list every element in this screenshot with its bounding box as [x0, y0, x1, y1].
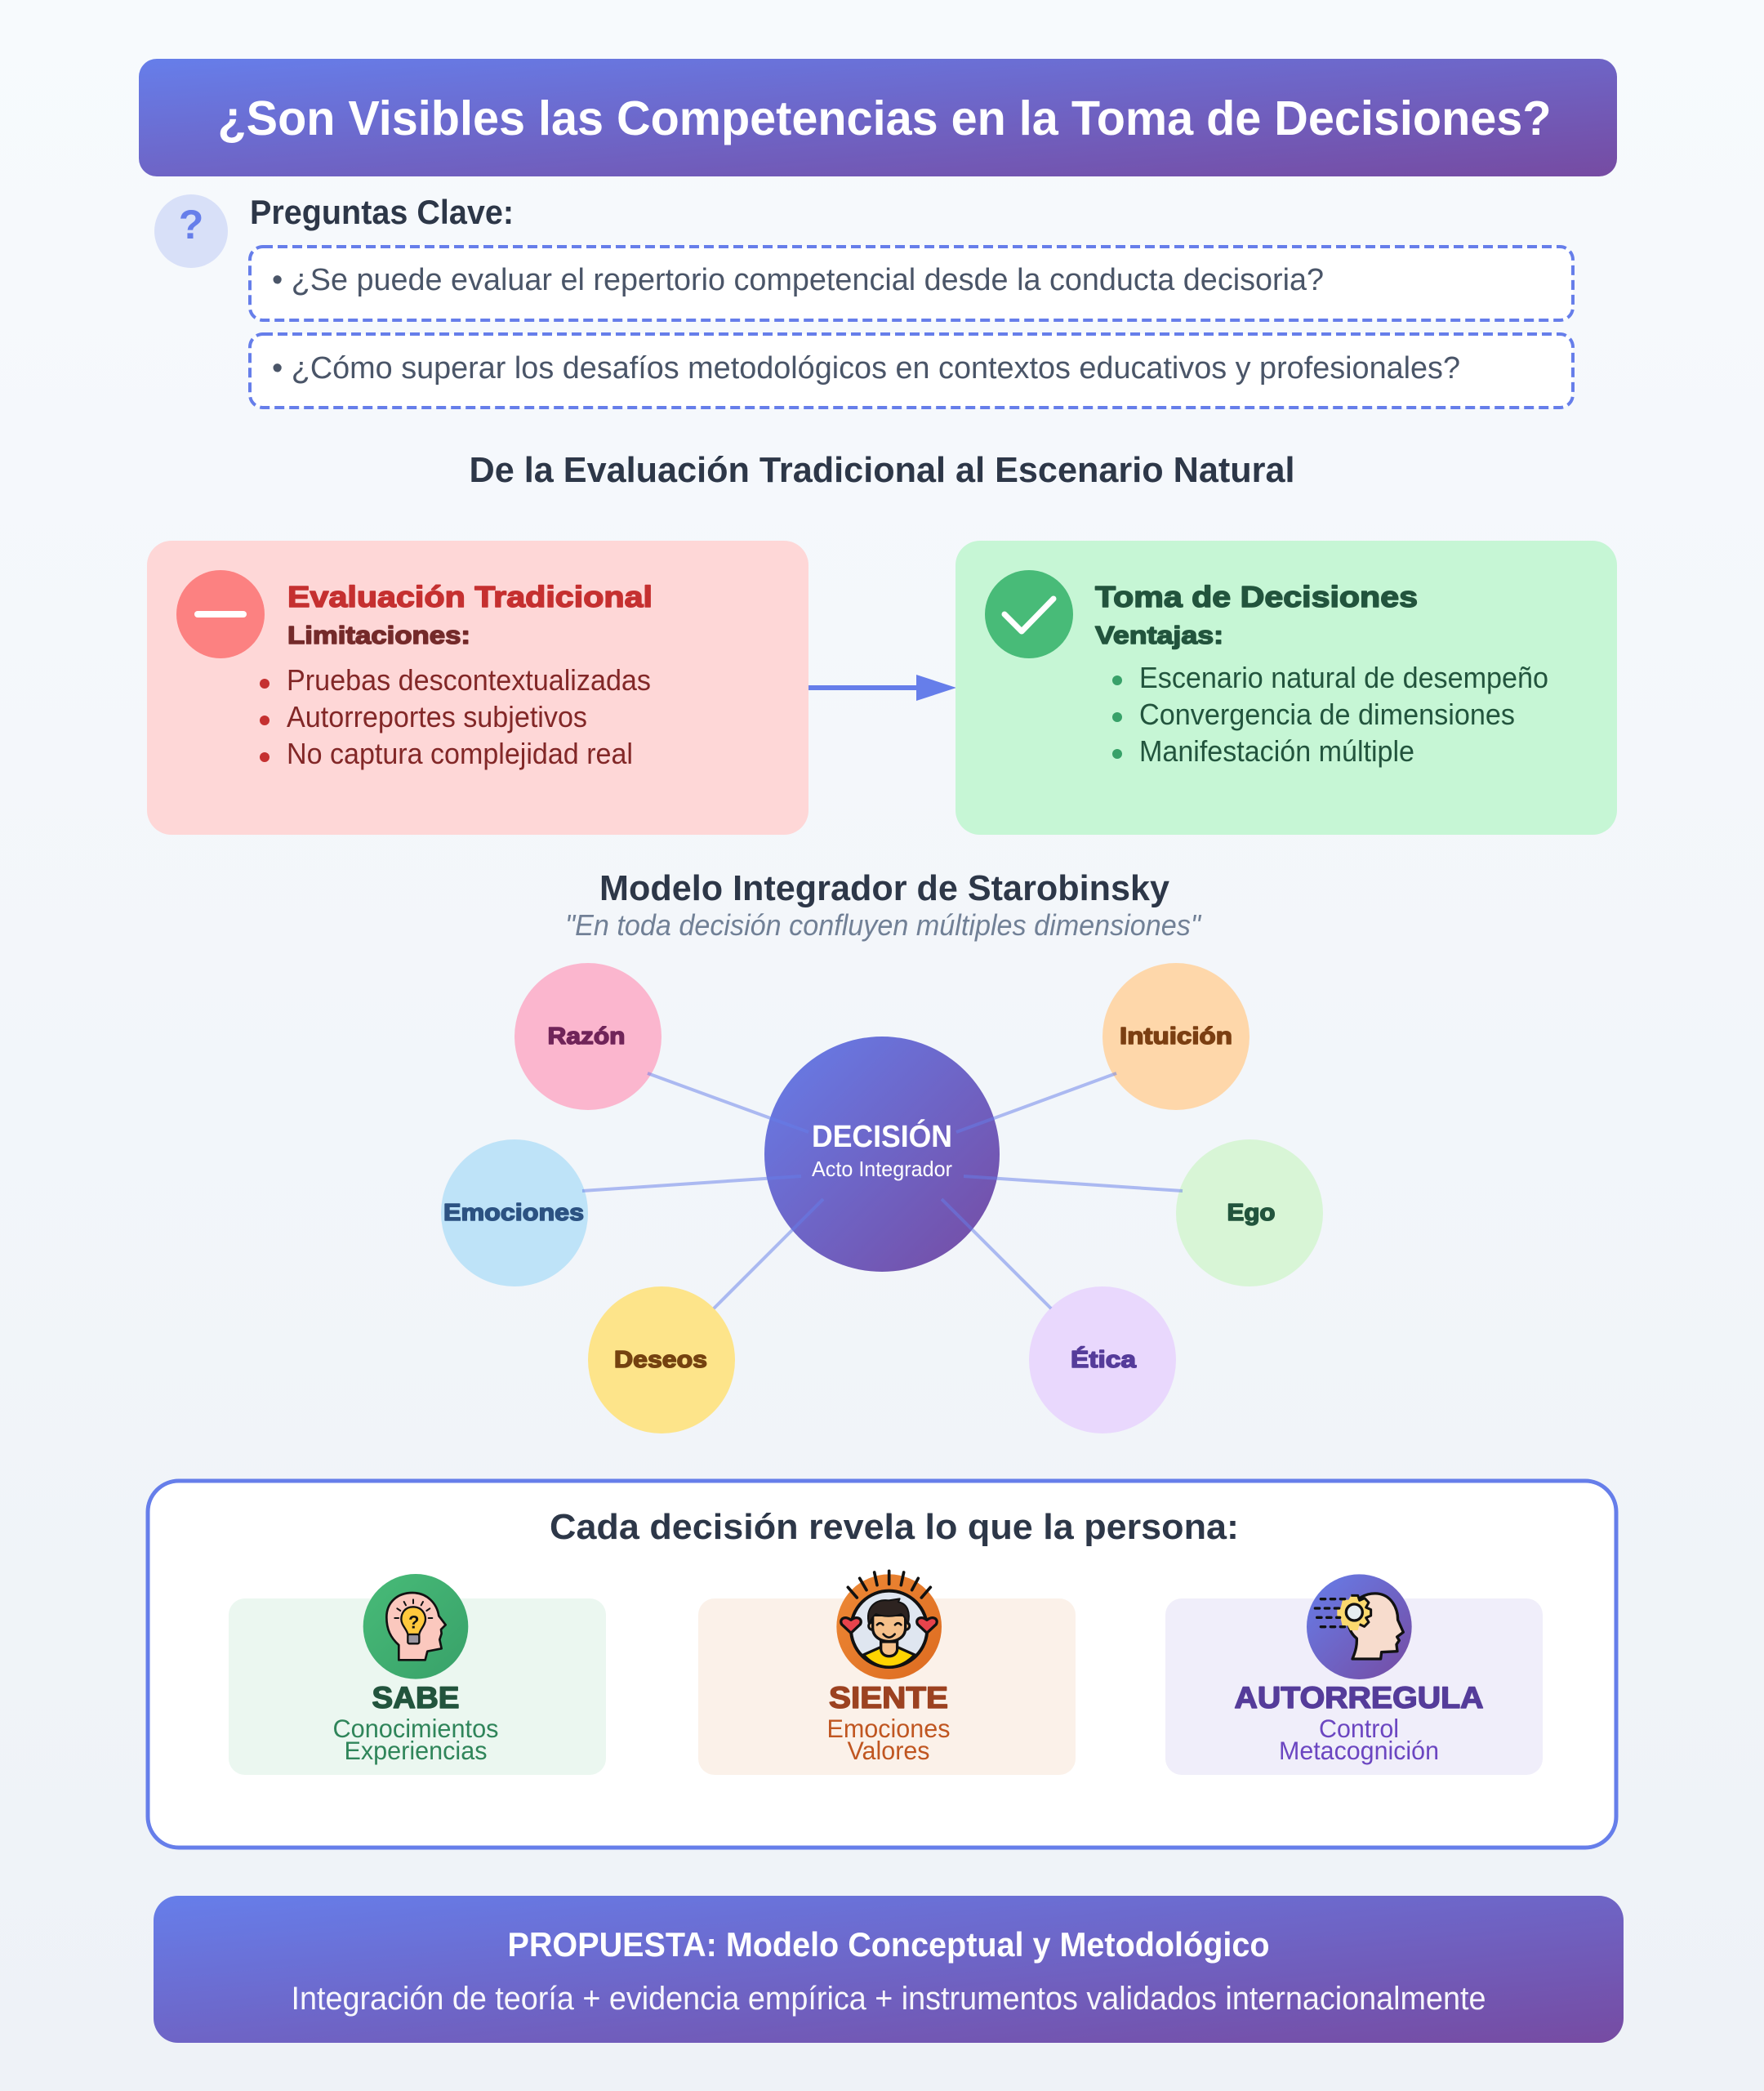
- icon: person with hearts: [836, 1571, 942, 1679]
- proposal text: Integración de teoría + evidencia empírica + instrumentos validados internacionalmente: [291, 1981, 1486, 2017]
- icon: question mark: [154, 194, 228, 268]
- card: sabe: [229, 1574, 606, 1775]
- decision making heading: Toma de Decisiones: [1095, 580, 1418, 613]
- panel heading: Cada decisión revela lo que la persona:: [550, 1507, 1239, 1547]
- sabe details: [333, 1714, 498, 1765]
- node: razón: Razón: [547, 1023, 626, 1050]
- node: razón: [514, 963, 662, 1110]
- node: emociones: [441, 1139, 588, 1286]
- section heading: integrative model: Modelo Integrador de Starobinsky: [599, 868, 1170, 908]
- diagram: decision model: [441, 963, 1323, 1433]
- header banner: [139, 59, 1617, 176]
- autorregula details: [1279, 1714, 1439, 1765]
- model quote: "En toda decisión confluyen múltiples dimensiones": [565, 908, 1202, 942]
- limitations list: [260, 663, 651, 770]
- section heading: evaluation transition: De la Evaluación Tradicional al Escenario Natural: [469, 450, 1295, 490]
- node: center decision: DECISIÓN: [812, 1118, 952, 1154]
- title: ¿Son Visibles las Competencias en la Toma de Decisiones?: [217, 91, 1552, 145]
- card: autorregula: [1165, 1574, 1543, 1775]
- autorregula label: AUTORREGULA: [1235, 1681, 1483, 1714]
- icon: question mark: ?: [179, 202, 203, 247]
- arrow: traditional to decisions: [808, 675, 956, 701]
- autorregula details: Control: [1319, 1714, 1399, 1743]
- icon: head with gear: [1307, 1574, 1412, 1679]
- heading: preguntas clave: Preguntas Clave:: [250, 193, 514, 231]
- icon: check: [985, 570, 1073, 658]
- node: emociones: Emociones: [443, 1200, 584, 1226]
- sabe label: SABE: [372, 1681, 459, 1714]
- card: siente: [698, 1571, 1076, 1775]
- advantages list: Escenario natural de desempeño: [1139, 661, 1548, 694]
- sabe details: Experiencias: [345, 1736, 487, 1765]
- node: deseos: Deseos: [614, 1347, 707, 1373]
- limitations label: Limitaciones:: [287, 621, 470, 649]
- advantages list: Manifestación múltiple: [1139, 734, 1414, 768]
- node: deseos: [588, 1286, 735, 1433]
- advantages list: Convergencia de dimensiones: [1139, 698, 1515, 731]
- advantages list: [1112, 661, 1548, 768]
- connector lines: [582, 1073, 1183, 1309]
- autorregula details: Metacognición: [1279, 1736, 1439, 1765]
- question box 1: • ¿Se puede evaluar el repertorio competencial desde la conducta decisoria?: [272, 263, 1324, 297]
- limitations list: Pruebas descontextualizadas: [287, 663, 651, 697]
- siente details: Valores: [848, 1736, 929, 1765]
- panel: traditional evaluation: [147, 541, 808, 835]
- question box 2: • ¿Cómo superar los desafíos metodológicos en contextos educativos y profesionales?: [272, 351, 1460, 386]
- proposal heading: PROPUESTA: Modelo Conceptual y Metodológico: [508, 1925, 1269, 1964]
- proposal banner: [154, 1896, 1624, 2043]
- icon: minus: [176, 570, 265, 658]
- node: ética: [1029, 1286, 1176, 1433]
- limitations list: Autorreportes subjetivos: [287, 700, 587, 733]
- question box 1: [250, 247, 1573, 320]
- advantages label: Ventajas:: [1095, 621, 1223, 649]
- siente label: SIENTE: [829, 1681, 948, 1714]
- siente details: [826, 1714, 951, 1765]
- limitations list: No captura complejidad real: [287, 737, 633, 770]
- panel: what each decision reveals: [148, 1481, 1616, 1848]
- panel: key questions: [154, 193, 1573, 408]
- node: intuición: Intuición: [1120, 1023, 1232, 1050]
- panel: decision making: [956, 541, 1617, 835]
- node: center decision: [764, 1037, 1000, 1272]
- node: ética: Ética: [1071, 1345, 1137, 1373]
- node: intuición: [1102, 963, 1250, 1110]
- node: center decision: Acto Integrador: [812, 1157, 952, 1181]
- node: ego: [1176, 1139, 1323, 1286]
- traditional evaluation heading: Evaluación Tradicional: [287, 580, 653, 613]
- icon: head with bulb: [363, 1574, 468, 1679]
- siente details: Emociones: [826, 1714, 951, 1743]
- question box 2: [250, 334, 1573, 408]
- node: ego: Ego: [1227, 1200, 1276, 1226]
- icon: head with bulb: ?: [408, 1612, 419, 1632]
- sabe details: Conocimientos: [333, 1714, 498, 1743]
